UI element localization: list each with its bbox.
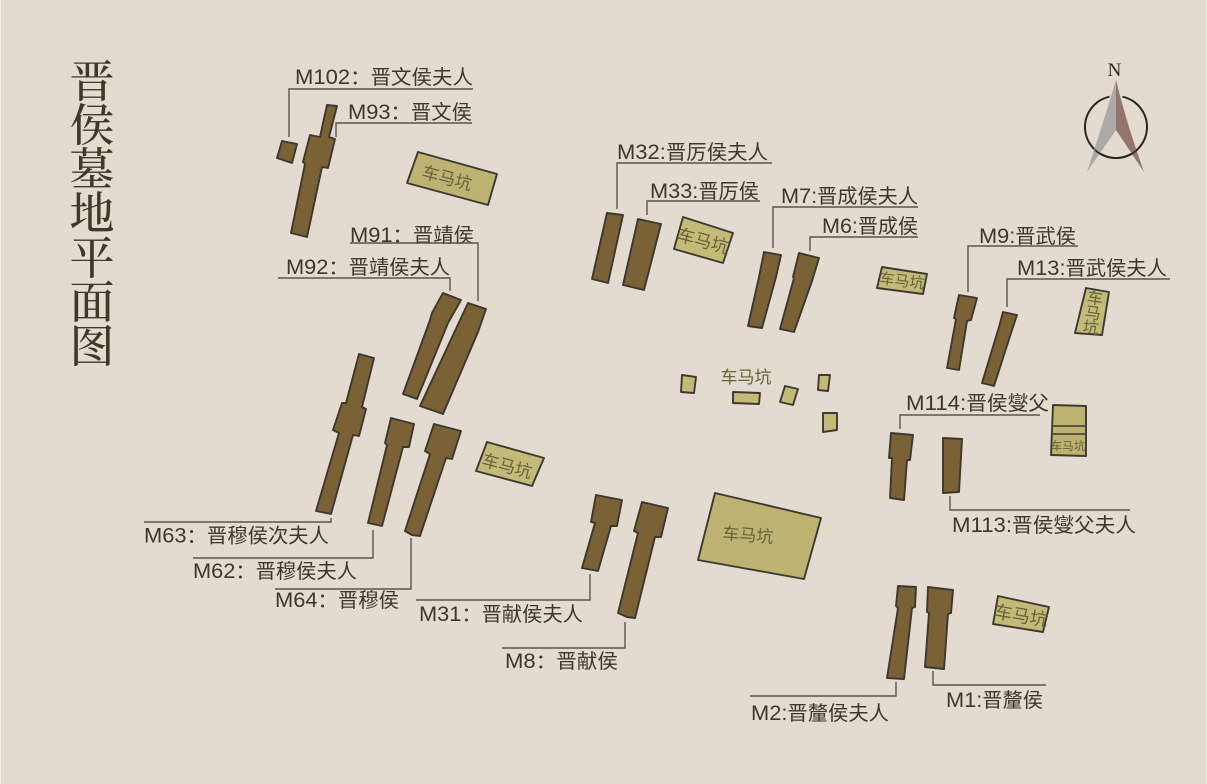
label: M114: M114:晋侯燮父 — [906, 391, 1049, 415]
label: M31 — [416, 574, 590, 626]
label: M93: M93：晋文侯 — [348, 100, 472, 124]
chariot pit near M114 (stacked) — [1051, 405, 1086, 456]
title: 平 — [69, 222, 115, 287]
label: M13 — [1007, 256, 1170, 307]
label: M64: M64：晋穆侯 — [275, 588, 399, 612]
central chariot pit group — [681, 368, 837, 432]
label: M13: M13:晋武侯夫人 — [1017, 256, 1167, 280]
chariot pit near M13 (vertical): 马 — [1084, 303, 1102, 324]
tomb: M63 — [316, 354, 374, 514]
chariot pit near M64 — [476, 442, 544, 486]
icon: north compass: N — [1108, 60, 1122, 81]
label: M1: M1:晋釐侯 — [946, 688, 1043, 712]
label: M93 — [336, 100, 472, 137]
tomb: M32 — [592, 213, 623, 283]
tomb: M9 — [947, 295, 977, 370]
chariot pit near M114 (stacked): 车马坑 — [1051, 439, 1086, 453]
title: 晋 — [69, 45, 115, 110]
large chariot pit — [698, 493, 821, 579]
tomb: M113 — [943, 438, 962, 493]
central chariot pit group: 车马坑 — [720, 368, 772, 387]
tomb: M1 — [925, 587, 953, 669]
label: M63: M63：晋穆侯次夫人 — [144, 524, 329, 548]
large chariot pit: 车马坑 — [722, 524, 774, 547]
tomb: M2 — [887, 586, 916, 679]
tomb: M31 — [582, 495, 622, 571]
title: 侯 — [69, 89, 115, 154]
label: M2: M2:晋釐侯夫人 — [751, 701, 889, 725]
chariot pit near M33: 车马坑 — [675, 225, 731, 257]
label: M6 — [810, 214, 918, 251]
tomb: M114 — [889, 433, 913, 500]
tomb: M64 — [405, 424, 461, 536]
label: M8: M8：晋献侯 — [505, 649, 618, 673]
label: M113: M113:晋侯燮父夫人 — [952, 513, 1136, 537]
label: M91 — [350, 223, 478, 301]
label: M91: M91：晋靖侯 — [350, 223, 474, 247]
chariot pit near M13 (vertical): 车 — [1086, 289, 1104, 309]
label: M31: M31：晋献侯夫人 — [419, 602, 583, 626]
label: M102 — [289, 65, 473, 137]
label: M92: M92：晋靖侯夫人 — [286, 255, 450, 279]
label: M32: M32:晋厉侯夫人 — [617, 140, 768, 164]
label: M64 — [275, 538, 411, 612]
chariot pit near M64: 车马坑 — [480, 451, 534, 482]
label: M32 — [617, 140, 772, 209]
chariot pit near M9: 车马坑 — [879, 270, 925, 293]
chariot pit near M13 (vertical): 坑 — [1082, 318, 1100, 338]
title: 图 — [69, 310, 115, 375]
chariot pit near M93 — [407, 152, 497, 205]
label: M2 — [750, 682, 896, 725]
tomb: M91 — [420, 303, 486, 414]
label: M33: M33:晋厉侯 — [650, 179, 759, 203]
icon: north compass — [1085, 60, 1147, 172]
label: M102: M102：晋文侯夫人 — [295, 65, 473, 89]
tomb: M7 — [748, 252, 781, 328]
label: M8 — [502, 622, 625, 673]
label: M114 — [900, 391, 1049, 429]
tomb: M102 — [277, 141, 297, 163]
label: M1 — [933, 671, 1046, 712]
title — [69, 45, 115, 375]
tomb: M13 — [982, 312, 1017, 386]
tomb: M6 — [780, 253, 819, 332]
chariot pit near M1: 车马坑 — [993, 601, 1049, 631]
tomb: M8 — [618, 502, 668, 618]
tomb: M33 — [623, 219, 661, 290]
title: 墓 — [69, 133, 115, 198]
label: M7: M7:晋成侯夫人 — [781, 184, 918, 208]
title: 地 — [69, 177, 115, 242]
label: M113 — [950, 496, 1136, 537]
chariot pit near M93: 车马坑 — [420, 163, 474, 194]
label: M6: M6:晋成侯 — [822, 214, 918, 238]
chariot pit near M13 (vertical) — [1075, 288, 1109, 338]
tomb: M92 — [403, 293, 461, 399]
tomb: M93 — [291, 105, 337, 237]
title: 面 — [69, 266, 115, 331]
label: M62: M62：晋穆侯夫人 — [193, 559, 357, 583]
label: M33 — [647, 179, 760, 215]
label: M9 — [968, 224, 1078, 292]
label: M62 — [193, 530, 373, 583]
tomb: M62 — [368, 418, 414, 526]
label: M9: M9:晋武侯 — [979, 224, 1076, 248]
chariot pit near M33 — [674, 217, 733, 263]
label: M7 — [773, 184, 918, 248]
label: M92 — [278, 255, 450, 291]
